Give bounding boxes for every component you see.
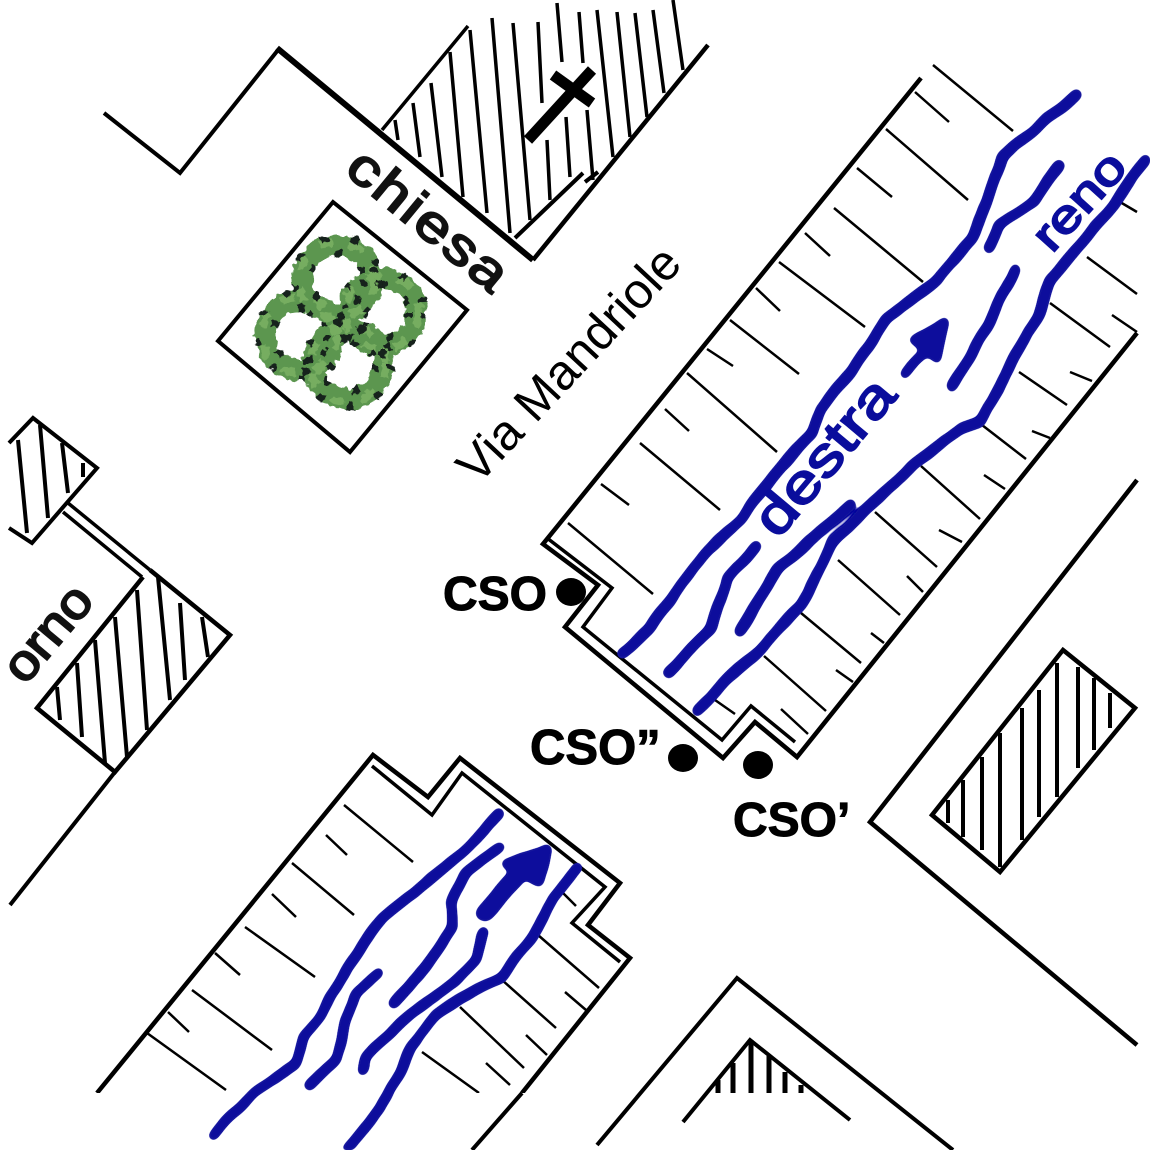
left hatched building bottom — [10, 570, 230, 905]
label: Via Mandriole: Via Mandriole — [446, 235, 692, 494]
river bottom — [213, 813, 577, 1150]
label: CSO double prime: CSO” — [530, 721, 661, 775]
church building — [104, 0, 708, 260]
label: reno: reno — [1022, 141, 1137, 261]
arrow: flow direction bottom — [485, 849, 548, 913]
road lines bottom — [472, 978, 953, 1150]
lower-left arcade block — [97, 755, 630, 1093]
river top: destra reno — [622, 94, 1145, 711]
label: destra: destra — [741, 365, 907, 547]
arrow: flow direction — [904, 321, 945, 374]
label: CSO prime: CSO’ — [733, 794, 850, 847]
right road and building — [870, 480, 1137, 1045]
marker: CSO — [556, 578, 586, 606]
marker: CSO double prime — [668, 744, 698, 772]
tree plot — [218, 202, 467, 452]
icon: cross — [528, 70, 592, 140]
left hatched building top — [9, 418, 150, 577]
marker: CSO prime — [743, 751, 773, 779]
icon: trees — [257, 237, 424, 407]
label: CSO: CSO — [443, 568, 547, 621]
CSO markers — [443, 568, 850, 847]
label: chiesa: chiesa — [336, 136, 523, 305]
right block of arcade — [543, 65, 1137, 758]
